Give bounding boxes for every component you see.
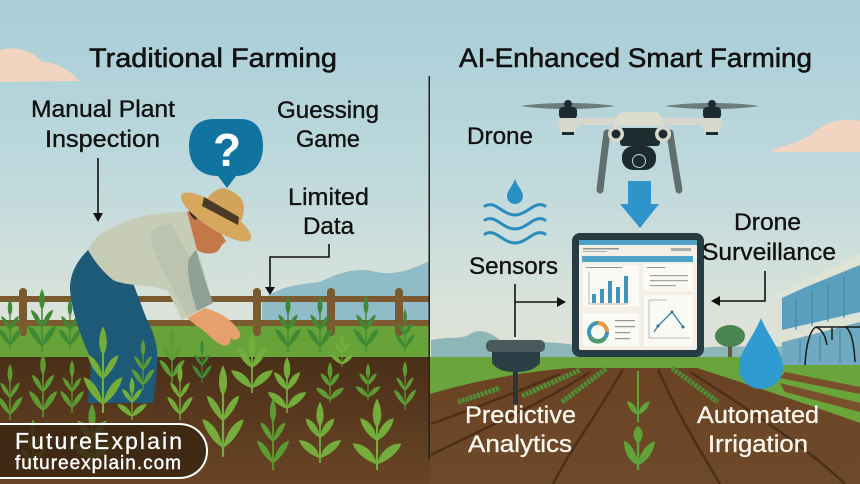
label: drone surveillance: [702, 209, 836, 266]
cloud right: [770, 120, 860, 152]
hair: [189, 205, 202, 220]
logo badge: [0, 424, 207, 478]
line chart panel: [644, 295, 693, 346]
label: guessing game: Guessing: [277, 97, 379, 124]
arms: [558, 118, 722, 125]
speech bubble with question mark: [189, 119, 263, 188]
farmer: [70, 185, 257, 403]
arrow: sensors to dashboard: [515, 284, 566, 337]
logo badge: futureexplain.com: [15, 453, 181, 474]
label: limited data: Data: [303, 213, 355, 240]
drone: [521, 100, 759, 190]
tree: [715, 325, 745, 357]
blue down arrow: [620, 181, 659, 228]
hat crown: [203, 188, 244, 226]
label: sensors: Sensors: [469, 253, 558, 280]
sleeve: [150, 224, 213, 316]
panel: smart farm ground: [430, 357, 860, 484]
propellers: [521, 103, 615, 109]
foreground plants: [0, 326, 416, 470]
label: automated irrigation: Automated: [697, 402, 819, 429]
panel: traditional ground: [0, 322, 430, 484]
dashboard tablet: [572, 233, 704, 357]
hands: [187, 308, 240, 346]
label: limited data: [288, 184, 369, 240]
title: smart farming: AI-Enhanced Smart Farming: [459, 43, 812, 73]
center seedlings: [624, 371, 655, 470]
label: drone surveillance: Surveillance: [702, 239, 836, 266]
body: [614, 112, 664, 126]
logo badge: FutureExplain: [15, 428, 182, 454]
speech bubble with question mark: ?: [213, 124, 241, 176]
camera: [622, 146, 656, 170]
face and neck: [187, 206, 226, 254]
label: drone: Drone: [467, 123, 533, 150]
building: [777, 254, 860, 365]
label: predictive analytics: [465, 402, 576, 458]
hat brim: [175, 185, 257, 249]
crop rows: [458, 368, 718, 402]
bar chart panel: [583, 265, 639, 307]
label: predictive analytics: Analytics: [468, 431, 572, 458]
hills right: [431, 331, 790, 360]
label: manual plant inspection: Inspection: [45, 126, 160, 153]
legs: [600, 133, 607, 190]
label: automated irrigation: [697, 402, 819, 458]
mountains left: [262, 261, 430, 330]
title: traditional farming: Traditional Farming: [89, 43, 337, 73]
fence: [0, 288, 429, 336]
arrow: surveillance to dashboard: [711, 271, 765, 306]
soil sensor device: [486, 340, 545, 404]
label: automated irrigation: Irrigation: [708, 431, 808, 458]
label: guessing game: Game: [296, 126, 360, 153]
cloud left: [0, 48, 79, 82]
shirt: [88, 212, 213, 320]
trousers: [70, 250, 157, 403]
donut panel: [583, 313, 639, 346]
water sensor icon: [485, 179, 545, 243]
label: manual plant inspection: [31, 96, 175, 153]
motors: [559, 107, 577, 119]
hat band: [202, 197, 239, 225]
text panel: [643, 264, 693, 291]
label: guessing game: [277, 97, 379, 153]
label: manual plant inspection: Manual Plant: [31, 96, 175, 123]
divider: [428, 76, 430, 459]
furrows: [431, 369, 845, 484]
label: limited data: Limited: [288, 184, 369, 211]
label: predictive analytics: Predictive: [465, 402, 576, 429]
arrow: limited data: [265, 244, 329, 295]
label: drone surveillance: Drone: [734, 209, 801, 236]
water drop: [739, 318, 783, 389]
header: [579, 240, 697, 245]
irrigation rig: [805, 327, 860, 365]
background plants: [0, 289, 415, 383]
arrow: manual inspection: [93, 158, 103, 222]
